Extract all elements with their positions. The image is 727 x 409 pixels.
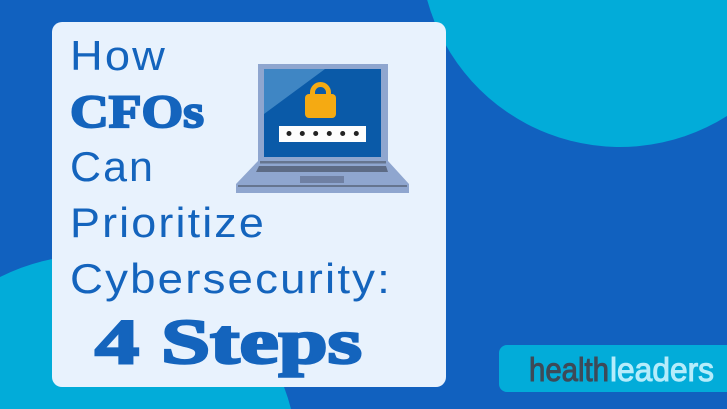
icon: laptop with password lock — [236, 64, 409, 193]
password field — [279, 126, 366, 142]
logo word: health: health — [529, 351, 609, 388]
title line: Cybersecurity: Cybersecurity: — [70, 255, 392, 302]
title line: How: How — [70, 32, 167, 79]
title line: CFOs: CFOs — [70, 86, 204, 138]
laptop lid — [258, 64, 388, 162]
screen highlight — [264, 69, 325, 114]
title line: 4 Steps: 4 Steps — [95, 307, 362, 377]
main title panel — [52, 22, 446, 387]
laptop base — [236, 161, 409, 193]
logo badge — [499, 345, 727, 392]
touchpad — [300, 176, 344, 183]
top right teal circle — [427, 0, 727, 147]
logo text — [529, 351, 714, 388]
title text — [70, 32, 392, 377]
title line: Can: Can — [70, 143, 155, 190]
keyboard — [256, 166, 388, 172]
logo word: leaders: leaders — [610, 351, 714, 388]
icon: padlock — [305, 84, 336, 118]
laptop screen — [264, 69, 381, 157]
title line: Prioritize: Prioritize — [70, 199, 266, 246]
bottom left teal circle — [0, 255, 291, 409]
